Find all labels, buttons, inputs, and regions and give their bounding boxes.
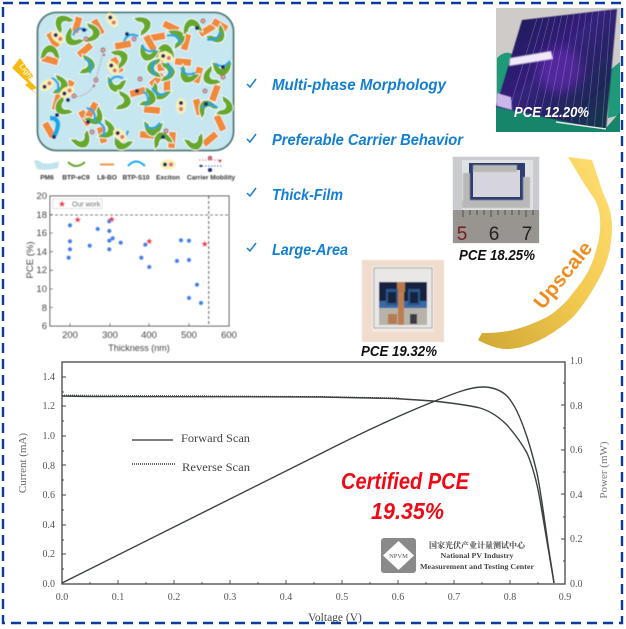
current reverse scan curve [62, 395, 400, 398]
y axis labels [36, 191, 47, 332]
bottom axis labels [56, 592, 571, 603]
line legend: reverse scan [132, 462, 250, 474]
bottom axis labels: 0.6 [392, 592, 404, 603]
point: thick film: Thick-Film [272, 187, 343, 204]
legend: morphology components: Carrier Mobility [187, 174, 236, 182]
left axis labels: 0.4 [42, 520, 55, 531]
photo: small-area device [362, 260, 444, 342]
left axis labels: 0.8 [42, 461, 55, 472]
center name: Measurement and Testing Center [420, 562, 535, 571]
power curve [62, 387, 554, 583]
bottom axis labels: 0.3 [224, 592, 236, 603]
y axis title: PCE (%) [25, 242, 36, 278]
right axis labels [570, 356, 582, 590]
chart: I-V and power curves [17, 356, 610, 624]
ruler numbers: 5 [457, 224, 467, 245]
left axis labels [42, 372, 55, 590]
left axis labels: 0.0 [42, 579, 55, 590]
arrow: upscale [478, 157, 612, 349]
y axis labels: 18 [36, 210, 47, 221]
photo: large-area module [496, 8, 620, 132]
photo: medium-area device [453, 157, 539, 245]
left axis labels: 1.2 [42, 401, 55, 412]
x axis labels [62, 330, 237, 341]
legend: morphology components: L8-BO [97, 174, 117, 182]
left axis title: Current (mA) [17, 433, 29, 493]
excitons [38, 11, 186, 144]
y axis labels: 10 [36, 284, 47, 295]
right axis labels: 0.6 [570, 445, 582, 456]
icon: light bolt [12, 58, 45, 101]
callout: certified PCE [341, 468, 470, 524]
bottom axis labels: 0.0 [56, 592, 68, 603]
y axis labels: 20 [36, 191, 47, 202]
chart legend: Our work [72, 202, 101, 208]
x axis title: Thickness (nm) [108, 343, 170, 353]
orange L8-BO bars [41, 16, 229, 149]
right axis labels: 1.0 [570, 356, 582, 367]
bottom axis labels: 0.9 [559, 592, 571, 603]
chart legend [53, 199, 102, 208]
bottom axis labels: 0.1 [112, 592, 124, 603]
bottom axis title: Voltage (V) [308, 612, 362, 624]
center name [420, 540, 535, 571]
small-area PCE label: PCE 19.32% [361, 343, 437, 360]
icon: NPVM logo [381, 538, 416, 573]
callout: certified PCE: 19.35% [371, 498, 444, 524]
x axis labels: 300 [102, 330, 118, 341]
green donor crescents [40, 10, 236, 154]
icon: blue carrier channel [50, 118, 58, 137]
key points list [247, 77, 464, 259]
center name: 国家光伏产业计量测试中心 [429, 540, 526, 550]
bottom axis labels: 0.5 [336, 592, 348, 603]
line legend: forward scan [132, 433, 250, 445]
right axis labels: 0.0 [570, 579, 582, 590]
legend: morphology components: BTP-eC9 [62, 174, 90, 182]
left axis labels: 1.0 [42, 431, 55, 442]
medium-area PCE label: PCE 18.25% [459, 247, 535, 264]
carriers and mobility path [52, 19, 225, 139]
point: large area: Large-Area [272, 242, 348, 259]
photo: medium-area device: 6 [489, 224, 499, 245]
point: carrier behavior: Preferable Carrier Behavior [272, 132, 464, 149]
bottom axis labels: 0.4 [280, 592, 292, 603]
module PCE label: PCE 12.20% [514, 104, 589, 121]
point: multi-phase morphology: Multi-phase Morphology [272, 77, 447, 94]
check marks [247, 79, 256, 251]
callout: certified PCE: Certified PCE [341, 468, 470, 494]
legend: morphology components: Exciton [156, 174, 180, 182]
blue BTP-S10 arcs [52, 26, 231, 142]
current forward scan curve [62, 396, 554, 583]
y axis labels: 16 [36, 228, 47, 239]
x axis labels: 200 [62, 330, 78, 341]
scatter chart: PCE vs thickness [25, 191, 237, 353]
right axis title: Power (mW) [598, 441, 610, 499]
bolt label: Light [17, 62, 36, 82]
y axis labels: 6 [42, 321, 47, 332]
right axis labels: 0.4 [570, 490, 582, 501]
left axis labels: 0.6 [42, 490, 55, 501]
icon: NPVM logo: NPVM [389, 553, 408, 560]
panel: blend morphology schematic [38, 10, 236, 154]
upscale label: Upscale [530, 238, 597, 314]
line legend: reverse scan: Reverse Scan [182, 462, 250, 474]
left axis labels: 1.4 [42, 372, 55, 383]
data points: our work [74, 216, 208, 247]
left axis labels: 0.2 [42, 549, 55, 560]
right axis labels: 0.8 [570, 401, 582, 412]
legend: morphology components: BTP-S10 [122, 174, 150, 182]
y axis labels: 14 [36, 247, 47, 258]
center name: National PV Industry [440, 551, 514, 560]
x axis labels: 500 [181, 330, 197, 341]
bottom axis labels: 0.2 [168, 592, 180, 603]
bottom axis labels: 0.8 [504, 592, 516, 603]
legend: morphology components: PM6 [40, 174, 54, 182]
y axis labels: 12 [36, 265, 47, 276]
certification logo and center name [381, 538, 535, 573]
photo: medium-area device: 7 [522, 224, 532, 245]
bottom axis labels: 0.7 [448, 592, 460, 603]
right axis labels: 0.2 [570, 534, 582, 545]
y axis labels: 8 [42, 303, 47, 314]
line legend: forward scan: Forward Scan [181, 433, 250, 445]
x axis labels: 600 [221, 330, 237, 341]
data points: literature [66, 219, 203, 305]
legend: morphology components [34, 156, 236, 182]
x axis labels: 400 [141, 330, 157, 341]
